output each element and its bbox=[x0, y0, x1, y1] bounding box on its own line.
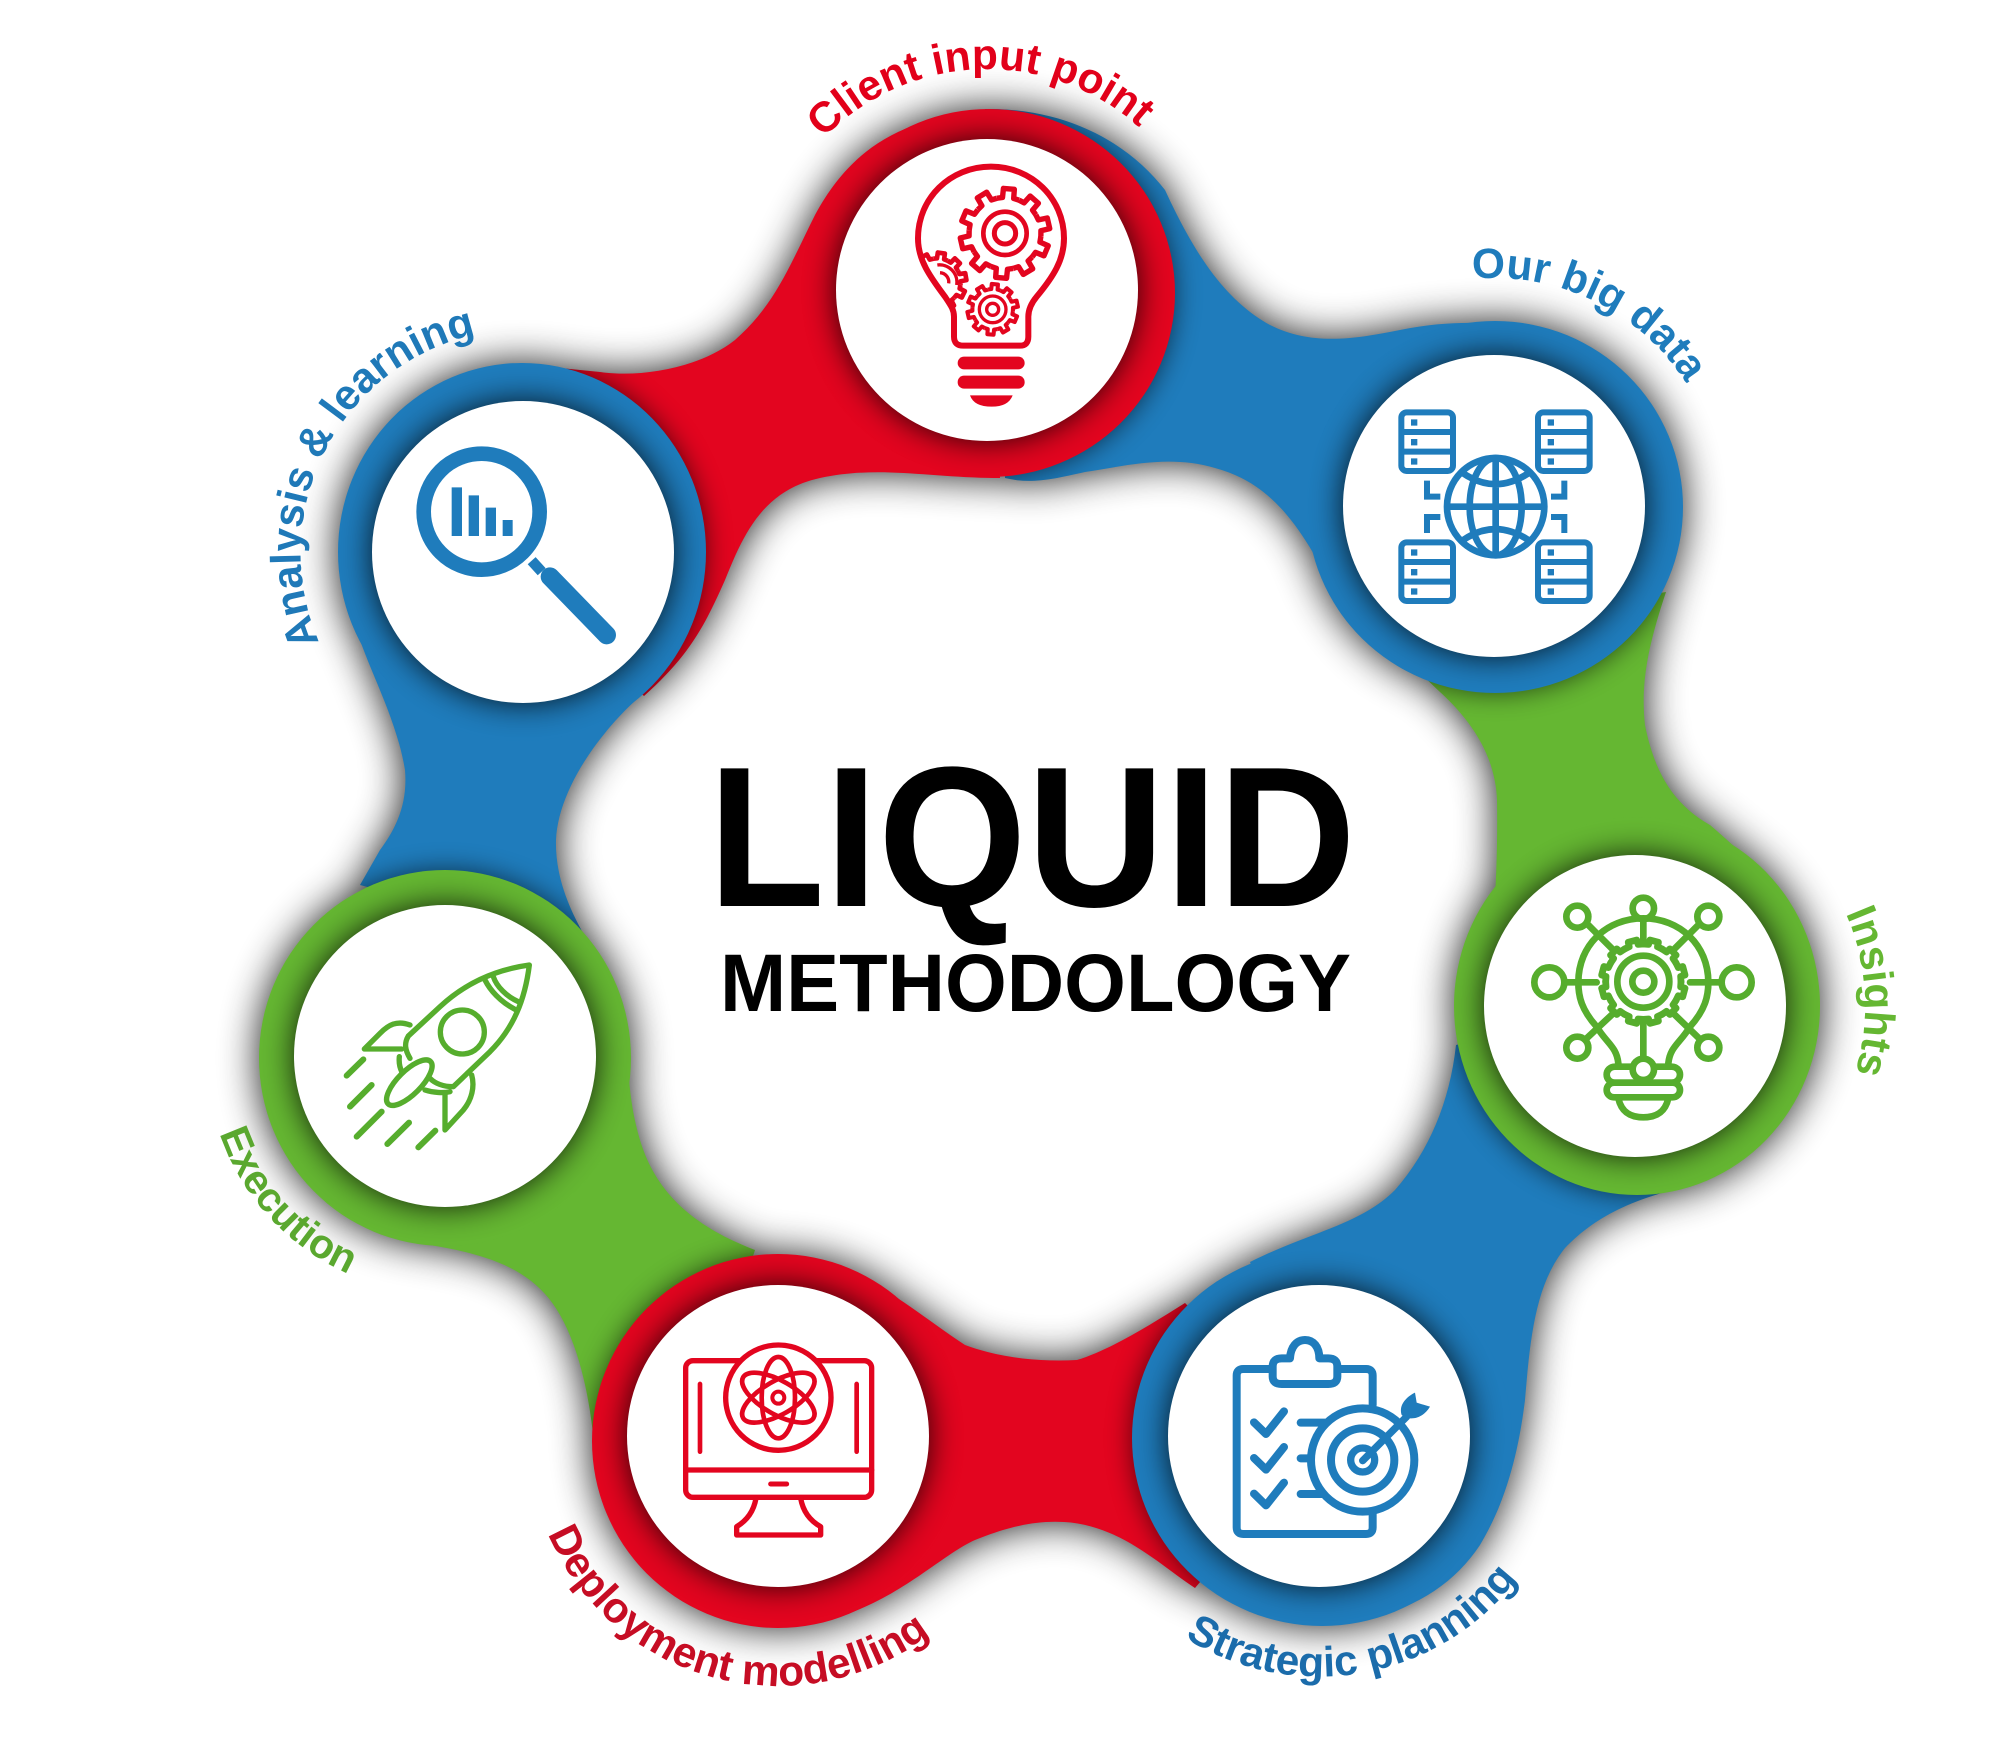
icon part: globe bbox=[1447, 458, 1544, 555]
node: deployment modelling bbox=[548, 1285, 930, 1686]
icon part: bulb outline bbox=[918, 167, 1064, 346]
icon part: large gear bbox=[955, 185, 1055, 282]
icon part: server top right bbox=[1538, 412, 1590, 471]
label: Client input point bbox=[810, 43, 1154, 192]
connector: red client to analysis bbox=[500, 112, 1000, 696]
icon part: bars bbox=[452, 487, 513, 536]
disc bbox=[1168, 1285, 1470, 1587]
icon part: gear bbox=[1592, 930, 1695, 1033]
icon part: left partial gear bbox=[923, 250, 969, 308]
icon part: window bbox=[440, 1010, 484, 1054]
connector: blue strategic to insights bbox=[1250, 1000, 1665, 1624]
icon part: nozzle bbox=[380, 1053, 439, 1112]
label: Deployment modelling bbox=[548, 1484, 930, 1686]
title line: liquid: LIQUID bbox=[708, 726, 1356, 949]
icon part: atom bbox=[726, 1345, 831, 1450]
inner shadows around white discs bbox=[294, 139, 1786, 1587]
icon part: small gear bbox=[965, 282, 1021, 337]
node: execution bbox=[220, 905, 596, 1273]
ring: big data blue bbox=[1307, 321, 1683, 693]
icon: clipboard with target bbox=[1237, 1340, 1430, 1534]
icon part: bulb and spokes bbox=[1565, 918, 1722, 1063]
ring: insights green bbox=[1454, 817, 1820, 1195]
infographic: liquid methodology bbox=[220, 43, 1896, 1686]
icon part: rocket body bbox=[399, 965, 529, 1093]
node: analysis and learning bbox=[270, 313, 674, 703]
panel: liquid ring shapes bbox=[259, 109, 1820, 1628]
icon part: connector brackets bbox=[1427, 481, 1564, 533]
ring: execution green bbox=[259, 870, 631, 1246]
icon: globe and servers bbox=[1401, 412, 1590, 601]
icon part: flames bbox=[347, 1059, 435, 1147]
icon part: checks and lines bbox=[1254, 1411, 1325, 1505]
title bbox=[708, 726, 1356, 1029]
cast shadows of rings on neighbouring connectors bbox=[360, 109, 1666, 1588]
icon part: target bbox=[1311, 1408, 1414, 1512]
connector: red deployment to strategic bbox=[778, 1268, 1320, 1625]
disc bbox=[372, 401, 674, 703]
disc bbox=[294, 905, 596, 1207]
label: Strategic planning bbox=[1188, 1566, 1519, 1686]
icon part: outer nodes bbox=[1534, 898, 1752, 1059]
icon part: server bottom left bbox=[1401, 542, 1453, 601]
icon: magnifier with bars bbox=[424, 454, 607, 635]
disc bbox=[836, 139, 1138, 441]
icon part: lens bbox=[424, 454, 540, 570]
label: Analysis & learning bbox=[270, 313, 516, 684]
node: insights bbox=[1484, 855, 1896, 1157]
connector: green insights to big data bbox=[1380, 592, 1790, 1010]
disc bbox=[627, 1285, 929, 1587]
connector: green execution to deployment bbox=[430, 1010, 755, 1444]
icon part: handle bbox=[532, 561, 607, 635]
icon part: server top left bbox=[1401, 412, 1453, 471]
disc bbox=[1484, 855, 1786, 1157]
icon part: base bbox=[1607, 1059, 1680, 1117]
node: strategic planning bbox=[1168, 1285, 1519, 1686]
icon part: bulb base bbox=[958, 357, 1025, 407]
icon: monitor with atom bbox=[686, 1345, 872, 1535]
label: Insights bbox=[1846, 904, 1896, 1075]
disc bbox=[1343, 355, 1645, 657]
icon part: arrow bbox=[1363, 1393, 1430, 1461]
ring: analysis blue bbox=[338, 363, 706, 741]
node: our big data bbox=[1343, 248, 1700, 657]
icon: rocket bbox=[347, 965, 529, 1147]
icon: bulb network with gear bbox=[1534, 898, 1752, 1117]
label: Our big data bbox=[1434, 248, 1700, 384]
icon part: clipboard bbox=[1237, 1369, 1373, 1534]
ring: deployment red bbox=[592, 1254, 964, 1628]
ring: strategic blue bbox=[1132, 1250, 1512, 1626]
icon part: server bottom right bbox=[1538, 542, 1590, 601]
icon: light bulb with gears bbox=[904, 167, 1064, 407]
subtitle line: methodology: METHODOLOGY bbox=[720, 938, 1351, 1029]
icon part: clip bbox=[1273, 1340, 1337, 1384]
label: Execution bbox=[220, 1125, 354, 1273]
icon part: fins bbox=[364, 1023, 473, 1130]
icon part: nose bands bbox=[485, 977, 518, 1009]
ring: client red bbox=[803, 109, 1175, 477]
connector: blue big data to client bbox=[985, 109, 1500, 640]
connector: blue analysis to execution bbox=[352, 560, 645, 945]
node: client input point bbox=[810, 43, 1154, 441]
icon part: monitor bbox=[686, 1361, 872, 1535]
